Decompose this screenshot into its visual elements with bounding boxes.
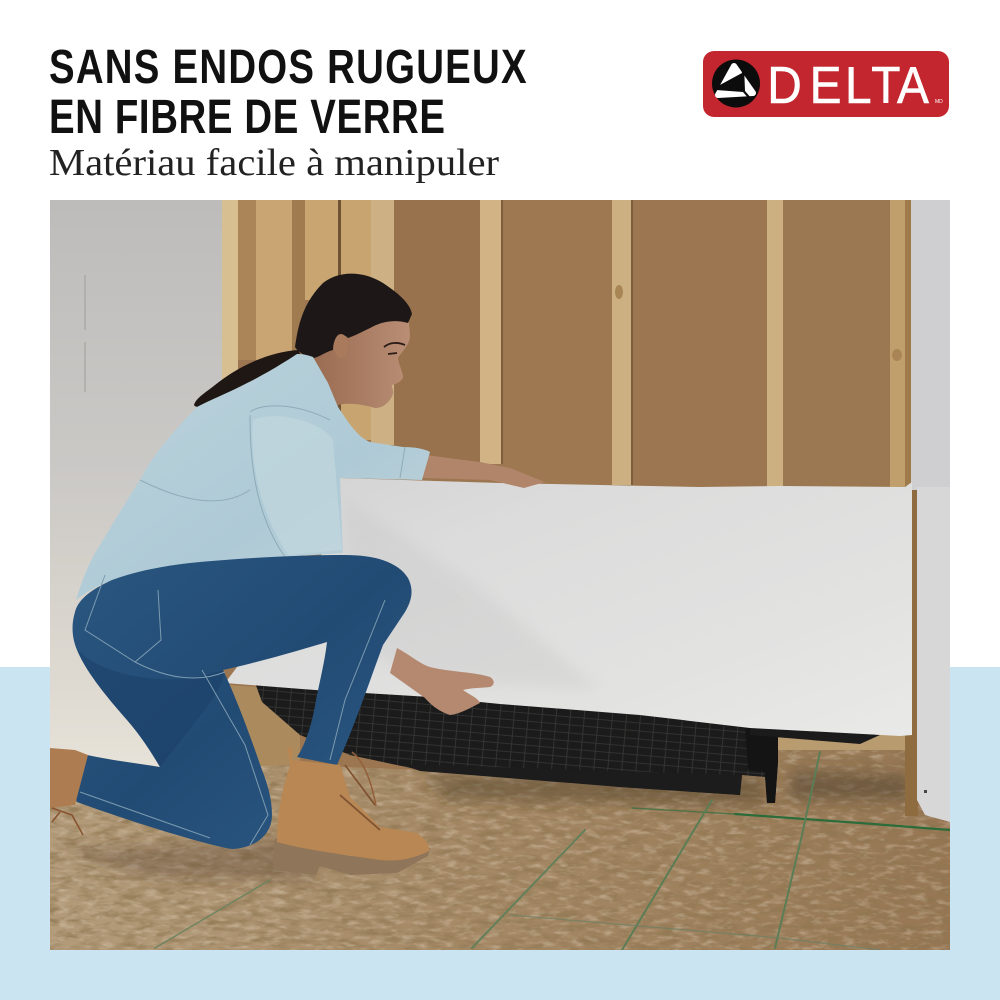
boot upper xyxy=(277,747,429,861)
ear xyxy=(334,334,344,346)
tub shading xyxy=(384,564,569,680)
back boot xyxy=(50,748,88,835)
subtitle: Matériau facile à manipuler xyxy=(49,142,499,184)
right stud and drywall xyxy=(905,200,950,822)
boot laces xyxy=(340,765,380,830)
lower framing behind tub xyxy=(228,685,300,772)
drywall printed marks xyxy=(84,275,86,392)
black tub base grating xyxy=(254,680,880,803)
jeans dark fold xyxy=(78,650,224,767)
boot sole xyxy=(273,838,430,875)
green chalk lines xyxy=(155,752,950,950)
registered mark: MD xyxy=(935,99,943,105)
jeans xyxy=(73,555,412,849)
logo red badge xyxy=(703,51,949,117)
front boot xyxy=(273,747,430,875)
shirt highlights xyxy=(253,416,342,555)
logo emblem xyxy=(712,60,760,108)
back wall brown sheathing xyxy=(223,200,890,770)
white tub apron xyxy=(225,478,912,736)
title block xyxy=(49,41,527,184)
neck and face xyxy=(313,318,410,408)
logo wordmark: DELTA xyxy=(767,56,930,114)
hair xyxy=(295,274,412,358)
floor shadows xyxy=(60,770,915,880)
eyebrow and eye xyxy=(384,343,405,354)
baseboard strip behind tub right xyxy=(778,735,905,750)
jeans seams xyxy=(80,575,385,845)
heading line 2: EN FIBRE DE VERRE xyxy=(49,91,445,144)
Delta logo xyxy=(703,51,949,117)
photo panel xyxy=(50,200,950,950)
brown panel tonal patches xyxy=(394,200,890,490)
heading line 1: SANS ENDOS RUGUEUX xyxy=(49,41,527,94)
shirt seams and folds xyxy=(140,406,405,557)
stud framing xyxy=(222,200,911,490)
front forearm and hand xyxy=(390,648,494,715)
light blue background band xyxy=(0,667,1000,1000)
ponytail xyxy=(194,350,305,407)
rear forearm on tub xyxy=(423,455,545,488)
shirt xyxy=(76,354,430,600)
woman figure xyxy=(50,274,545,875)
left drywall xyxy=(50,200,222,810)
floor xyxy=(50,750,950,950)
